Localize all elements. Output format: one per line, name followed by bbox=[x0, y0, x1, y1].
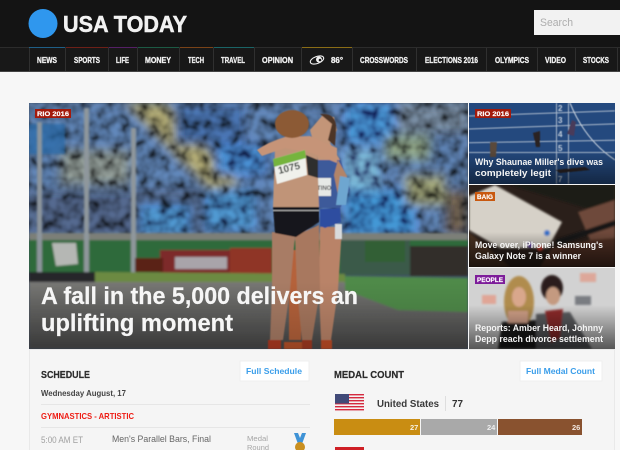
story headline: Move over, iPhone! Samsung's bbox=[475, 240, 603, 251]
panel: medal count bbox=[334, 361, 602, 450]
panel: story Shaunae Miller bbox=[469, 103, 615, 184]
panel: story Shaunae Miller: 7 bbox=[558, 175, 563, 184]
hero photo: stadium crowd bbox=[29, 103, 468, 238]
button: full medal count: Full Medal Count bbox=[526, 366, 595, 376]
panel: lower section background bbox=[30, 350, 614, 450]
tag: Rio 2016: RIO 2016 bbox=[477, 111, 509, 118]
navigation bar: NEWS bbox=[37, 56, 58, 65]
date: Wednesday August, 17 bbox=[41, 388, 126, 398]
search box bbox=[534, 10, 620, 35]
tag: Rio 2016 bbox=[475, 109, 511, 118]
navigation bar: VIDEO bbox=[545, 56, 566, 65]
medal total: 77 bbox=[452, 398, 463, 410]
event name: Men's Parallel Bars, Final bbox=[112, 434, 211, 445]
tag: Rio 2016: RIO 2016 bbox=[37, 111, 69, 118]
tag: Baig bbox=[475, 192, 495, 201]
hero photo: two runners embracing: TINO bbox=[317, 186, 332, 192]
navigation bar: OLYMPICS bbox=[495, 56, 530, 65]
icon: weather bbox=[309, 54, 325, 66]
navigation bar: CROSSWORDS bbox=[360, 56, 409, 65]
panel: story Shaunae Miller: 4 bbox=[558, 130, 563, 139]
navigation bar: MONEY bbox=[145, 56, 172, 65]
story headline bbox=[475, 158, 603, 178]
panel: hero story bbox=[29, 103, 468, 349]
stacked medal bar bbox=[334, 419, 582, 435]
navigation bar: SPORTS bbox=[74, 56, 101, 65]
icon: China flag bbox=[335, 447, 364, 450]
story headline: Depp reach divorce settlement bbox=[475, 334, 604, 345]
navigation bar bbox=[0, 47, 620, 72]
navigation bar: OPINION bbox=[262, 56, 293, 65]
country name: United States bbox=[377, 399, 439, 410]
story headline bbox=[475, 242, 603, 261]
tag: People: PEOPLE bbox=[477, 277, 504, 284]
button: full schedule: Full Schedule bbox=[246, 366, 302, 376]
panel: schedule bbox=[41, 361, 310, 450]
icon: gold medal bbox=[294, 433, 306, 450]
stacked medal bar: 27 bbox=[410, 423, 418, 432]
event round: Medal bbox=[247, 434, 268, 443]
navigation bar: LIFE bbox=[116, 56, 129, 65]
navigation bar: TRAVEL bbox=[221, 56, 245, 65]
panel: story Shaunae Miller: 3 bbox=[558, 116, 563, 125]
heading: SCHEDULE bbox=[41, 370, 90, 381]
navigation bar: TECH bbox=[188, 56, 204, 65]
icon: US flag bbox=[335, 394, 364, 412]
event time: 5:00 AM ET bbox=[41, 435, 83, 445]
panel: story Amber Heard and Johnny Depp bbox=[469, 268, 615, 349]
stacked medal bar: 26 bbox=[572, 423, 580, 432]
header bar bbox=[0, 0, 620, 47]
panel: story Shaunae Miller: 2 bbox=[558, 104, 563, 113]
hero photo: two runners embracing bbox=[257, 110, 350, 349]
logo: USA TODAY bbox=[63, 11, 187, 37]
heading: MEDAL COUNT bbox=[334, 370, 404, 381]
search box: Search bbox=[540, 17, 573, 29]
panel: story Samsung Galaxy Note 7 bbox=[469, 185, 615, 267]
navigation bar: 86° bbox=[331, 56, 343, 65]
story headline: Galaxy Note 7 is a winner bbox=[475, 251, 581, 262]
event round bbox=[247, 434, 269, 450]
navigation bar: ELECTIONS 2016 bbox=[425, 56, 478, 65]
tag: Rio 2016 bbox=[35, 109, 71, 118]
tag: People bbox=[475, 275, 505, 284]
headline: uplifting moment bbox=[41, 310, 233, 337]
panel: story Shaunae Miller: 5 bbox=[558, 144, 563, 153]
sport name: GYMNASTICS - ARTISTIC bbox=[41, 411, 134, 421]
button: full medal count bbox=[520, 361, 602, 381]
hero photo: two runners embracing: 1075 bbox=[277, 161, 302, 177]
headline: A fall in the 5,000 delivers an bbox=[41, 283, 358, 310]
logo bbox=[28, 9, 187, 38]
story headline: Why Shaunae Miller's dive was bbox=[475, 157, 603, 168]
navigation bar: STOCKS bbox=[583, 56, 610, 65]
headline bbox=[41, 283, 358, 337]
hero photo: poles and barrier bbox=[29, 108, 468, 349]
story headline: completely legit bbox=[475, 168, 552, 179]
tag: Baig: BAIG bbox=[477, 194, 493, 201]
story headline: Reports: Amber Heard, Johnny bbox=[475, 323, 604, 334]
story headline bbox=[476, 324, 603, 344]
button: full schedule bbox=[240, 361, 309, 381]
stacked medal bar: 24 bbox=[487, 423, 496, 432]
